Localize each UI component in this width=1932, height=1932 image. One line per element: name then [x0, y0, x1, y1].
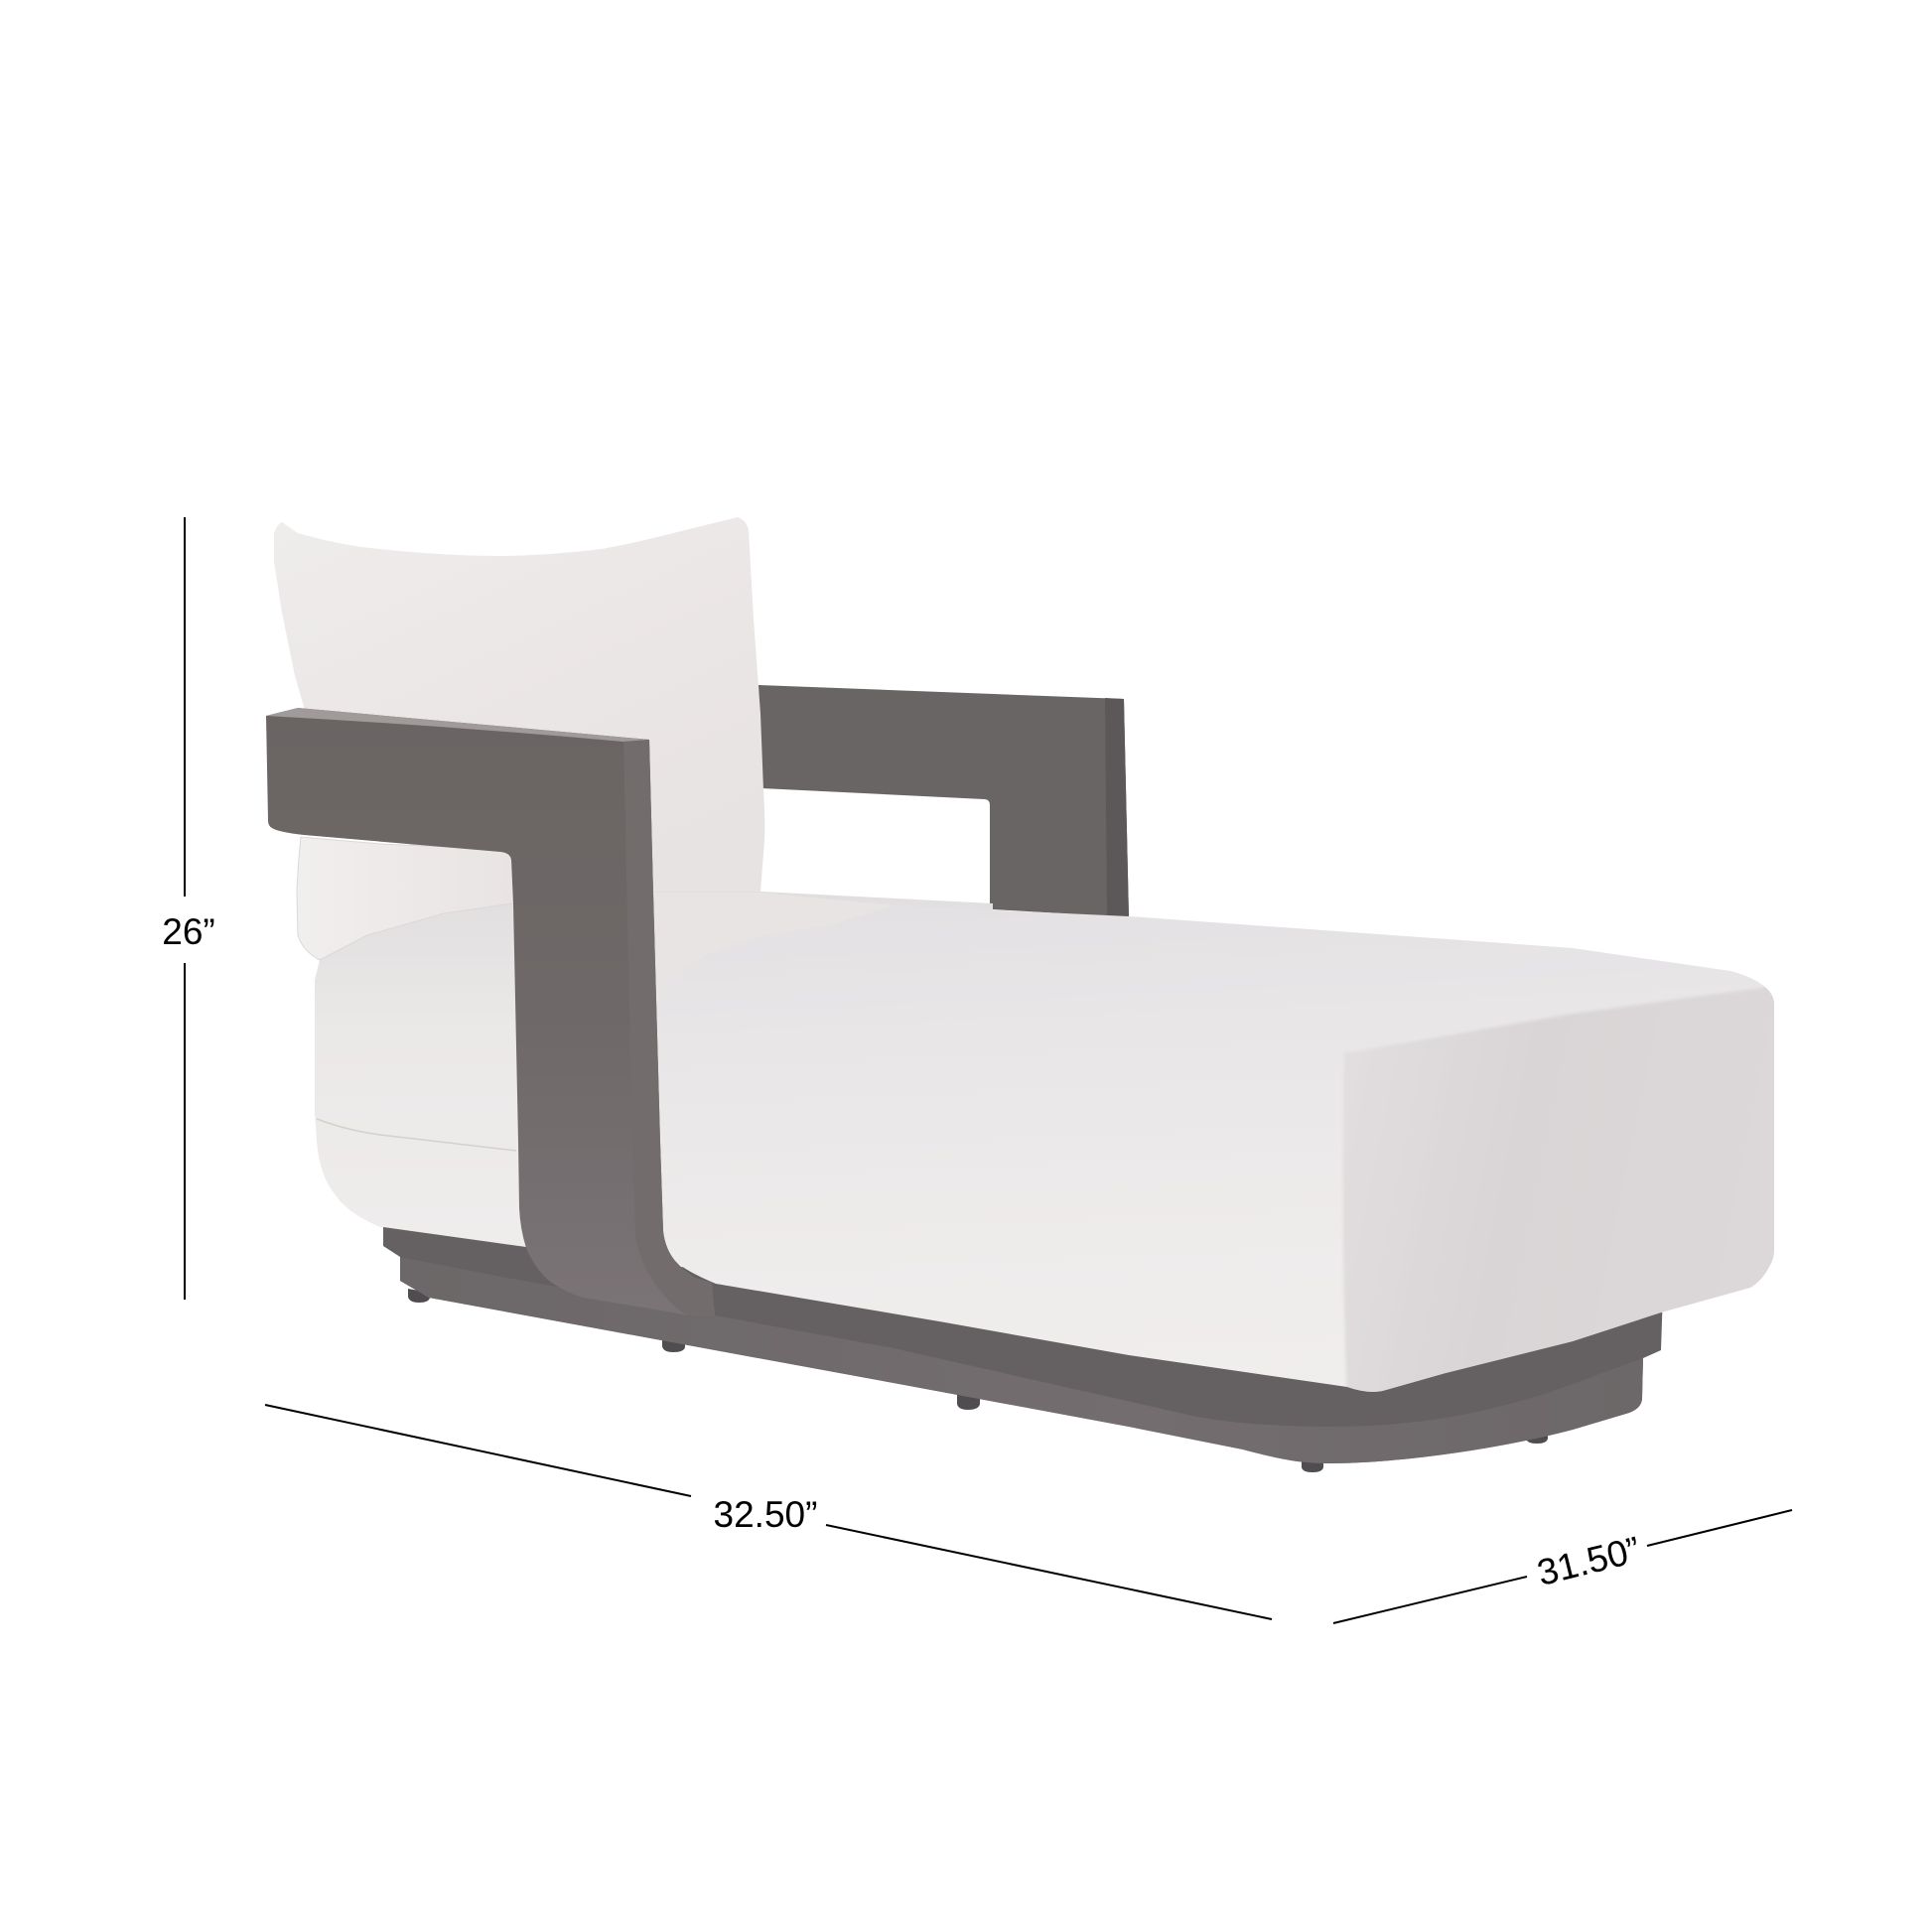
back seat strip behind chaise	[653, 893, 894, 993]
dimension: depth: 31.50”	[1533, 1529, 1644, 1593]
base lower tier	[400, 1257, 1643, 1463]
back pillow	[274, 517, 764, 895]
cushion end face	[1343, 987, 1774, 1392]
foot	[1526, 1426, 1548, 1444]
base upper tier	[383, 1227, 1663, 1463]
foot	[1302, 1454, 1323, 1472]
dimension: length	[265, 1405, 1272, 1619]
infographic: chaise with dimensions	[164, 517, 1793, 1624]
cushion top and front	[645, 898, 1787, 1400]
front arm of frame	[266, 708, 715, 1315]
dimension: height: 26”	[162, 911, 215, 952]
dimension: depth	[1333, 1510, 1792, 1623]
chaise cushion	[645, 898, 1787, 1410]
back arm of frame	[759, 685, 1129, 917]
frame front face	[266, 708, 715, 1315]
seat seam	[317, 1119, 516, 1151]
lower pillow	[297, 837, 513, 960]
frame top face	[266, 708, 649, 742]
frame edge strip	[623, 740, 715, 1315]
foot	[662, 1335, 685, 1352]
left seat cushion	[315, 892, 993, 1291]
base	[383, 1227, 1663, 1472]
dimension: length: 32.50”	[714, 1494, 817, 1535]
foot	[957, 1390, 980, 1410]
foot	[408, 1289, 430, 1303]
